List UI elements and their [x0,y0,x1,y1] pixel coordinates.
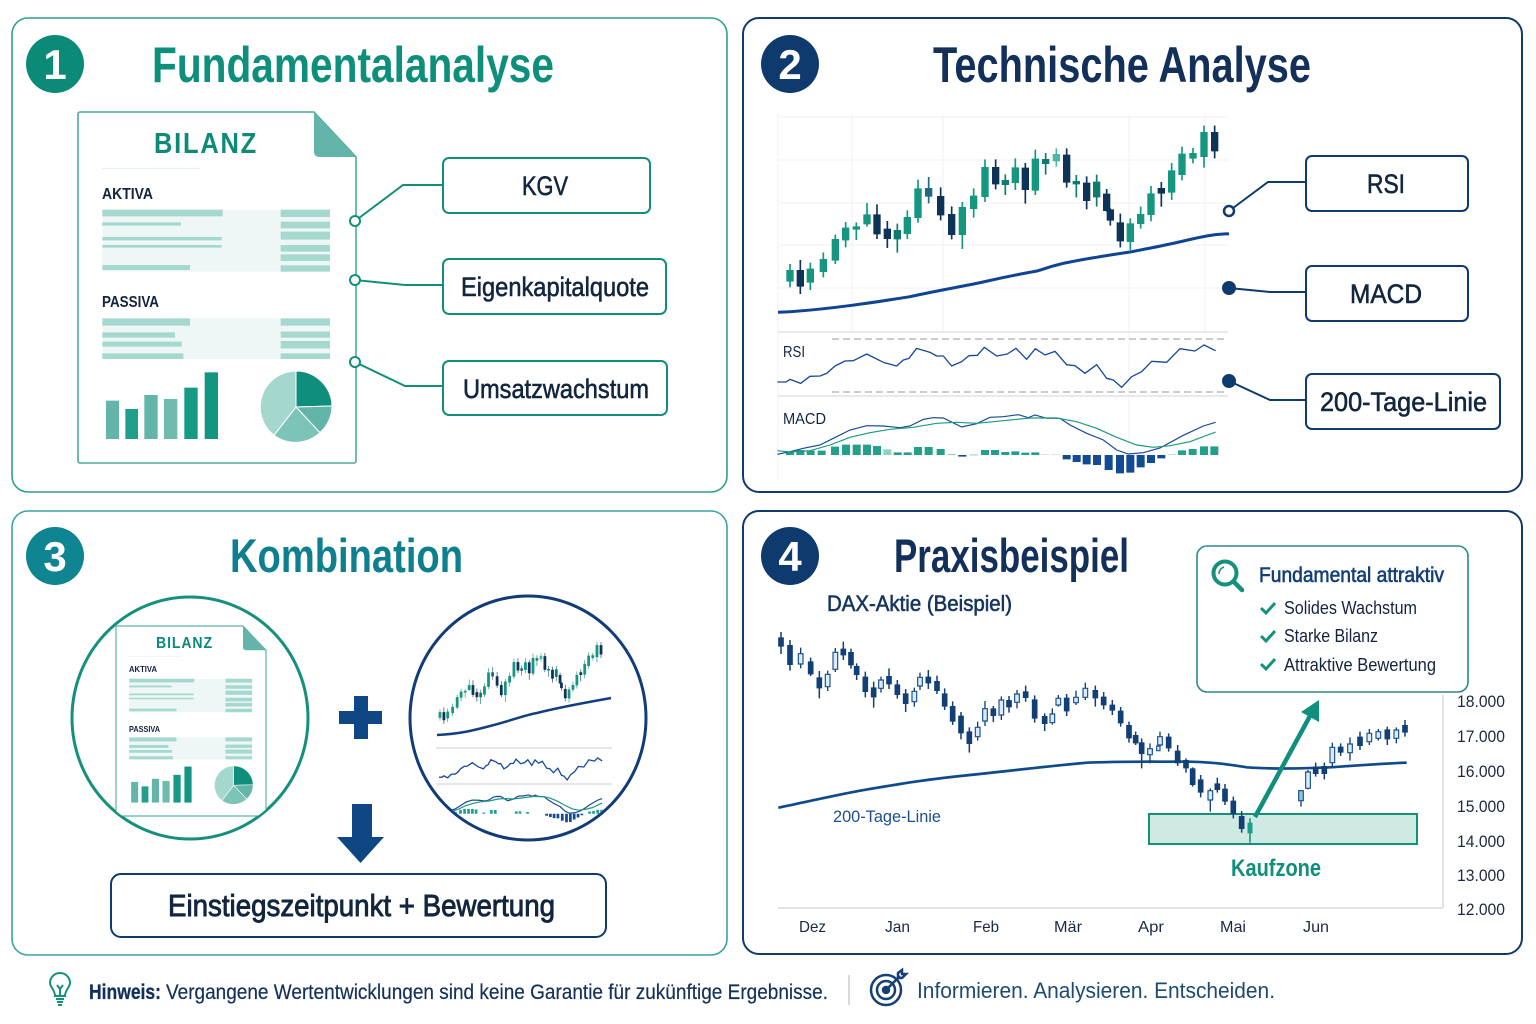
chart: DAX candlesticks [778,632,1443,908]
badge 2: 2 [778,41,802,88]
circle: technical chart [410,596,646,840]
icon: light bulb [50,973,70,1005]
kaufzone [1149,814,1417,844]
box: Umsatzwachstum [443,361,667,415]
chart: RSI indicator [777,332,1228,396]
circle: fundamental document [72,597,308,839]
badge 4 [761,527,819,585]
y axis labels: 16.000 [1457,762,1505,781]
checklist: Attraktive Bewertung [1284,655,1436,675]
label: Passiva: PASSIVA [129,724,160,734]
footer [50,970,1275,1005]
box: Umsatzwachstum: Umsatzwachstum [463,374,649,404]
box: KGV [443,158,650,213]
note text: Vergangene Wertentwicklungen sind keine Garantie für zukünftige Ergebnisse. [166,981,828,1004]
label: RSI: RSI [783,344,805,361]
badge 1: 1 [43,41,67,88]
arrow: down [337,804,384,863]
heading: Kombination: Kombination [230,529,463,582]
slogan: Informieren. Analysieren. Entscheiden. [917,978,1275,1003]
connector: 200-Tage-Linie [1223,375,1306,400]
chart: MACD indicator [777,411,1216,473]
connector: Eigenkapitalquote [350,275,443,285]
label: Aktiva: AKTIVA [102,186,153,203]
note: Hinweis: [89,981,161,1004]
callout: Fundamental attraktiv [1197,546,1468,692]
box: MACD: MACD [1350,279,1422,309]
x axis labels: Mär [1054,919,1083,936]
box: 200-Tage-Linie: 200-Tage-Linie [1320,387,1487,417]
document title: BILANZ [154,128,258,160]
heading: Praxisbeispiel: Praxisbeispiel [894,529,1129,582]
chart: price candlesticks with moving average [778,114,1229,480]
badge 1 [26,35,84,93]
box: Einstiegszeitpunkt + Bewertung: Einstiegszeitpunkt + Bewertung [168,888,555,923]
x axis labels [799,919,1329,936]
panel 3: Kombination [12,511,727,955]
label: Aktiva: AKTIVA [129,664,157,674]
y axis labels: 18.000 [1457,692,1505,711]
label: 200-Tage-Linie: 200-Tage-Linie [833,807,941,826]
icon: magnifier [1214,562,1242,590]
y axis labels: 12.000 [1457,900,1505,919]
box: KGV: KGV [522,171,568,201]
x axis labels: Dez [799,919,826,936]
panel 1: Fundamentalanalyse [12,18,727,492]
icon: target [871,970,906,1005]
x axis labels: Jan [885,919,910,936]
y axis labels: 17.000 [1457,727,1505,746]
label: MACD: MACD [783,411,826,428]
y axis labels: 15.000 [1457,797,1505,816]
badge 3: 3 [43,533,67,580]
box: Eigenkapitalquote [443,259,666,314]
panel 4: Praxisbeispiel [743,511,1522,954]
y axis labels [1457,692,1505,919]
box: RSI [1306,156,1468,211]
connector: RSI [1224,182,1306,216]
callout title: Fundamental attraktiv [1259,564,1444,587]
x axis labels: Apr [1138,919,1165,936]
y axis labels: 13.000 [1457,866,1505,885]
x axis labels: Jun [1303,919,1329,936]
arrow: up from Kaufzone [1255,700,1319,817]
connector: Umsatzwachstum [350,357,443,386]
checklist [1261,598,1436,675]
checklist: Solides Wachstum [1284,598,1417,618]
y axis labels: 14.000 [1457,832,1505,851]
connector: KGV [350,185,443,226]
document: Bilanz [78,112,356,463]
checklist: Starke Bilanz [1284,626,1378,646]
connector: MACD [1223,282,1306,294]
heading: Fundamentalanalyse: Fundamentalanalyse [152,37,554,93]
box: MACD [1306,266,1468,321]
subtitle: DAX-Aktie: DAX-Aktie (Beispiel) [827,591,1012,616]
document title: BILANZ [156,635,213,652]
box: Eigenkapitalquote: Eigenkapitalquote [461,272,649,302]
badge 4: 4 [778,533,802,580]
label: Kaufzone: Kaufzone [1231,855,1321,882]
box: RSI: RSI [1367,169,1405,199]
x axis labels: Feb [973,919,999,936]
plus icon [339,696,382,739]
badge 3 [26,527,84,585]
label: Passiva: PASSIVA [102,294,159,311]
x axis labels: Mai [1220,919,1246,936]
box: Einstiegszeitpunkt + Bewertung [111,874,606,937]
badge 2 [761,35,819,93]
panel 2: Technische Analyse [743,18,1522,492]
box: 200-Tage-Linie [1306,374,1500,429]
heading: Technische Analyse: Technische Analyse [933,37,1311,93]
